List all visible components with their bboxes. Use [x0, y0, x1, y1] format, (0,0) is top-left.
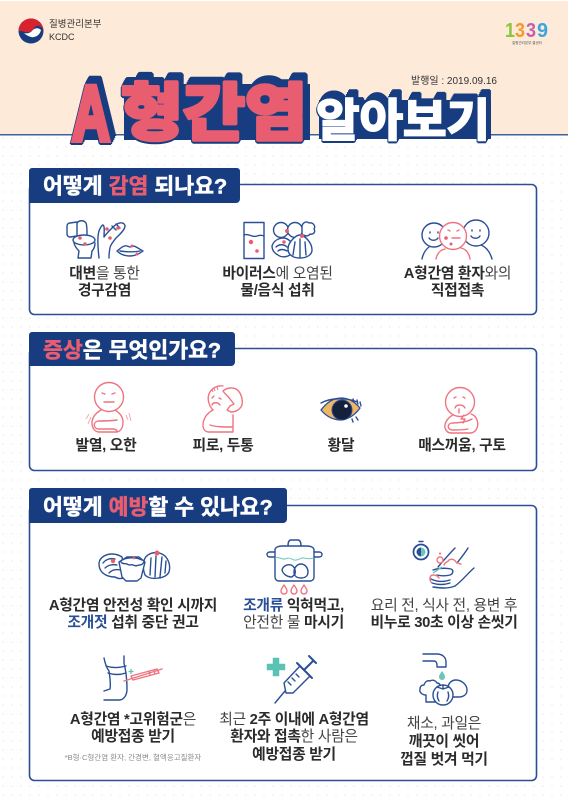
label: fatigue, headache: 피로, 두통: [193, 437, 253, 454]
label: high risk group vaccination: A형간염 *고위험군은: [70, 711, 196, 728]
icon: jaundiced eye: [321, 398, 361, 422]
icon: taegeuk emblem: [18, 18, 44, 44]
logo: 1339: 질병관리본부 콜센터: [512, 40, 542, 45]
panel: prevention: [29, 488, 536, 780]
icon: three people: [422, 220, 492, 259]
label: jaundice: 황달: [328, 437, 355, 454]
label: fecal-oral: 대변을 통한: [69, 265, 140, 282]
label: stop eating shellfish: [49, 597, 217, 631]
icon: syringe and cross: [267, 656, 316, 703]
icon: toilet, hand, lips: [67, 221, 143, 258]
label: stop eating shellfish: A형간염 안전성 확인 시까지: [49, 597, 217, 614]
icon: shellfish: [99, 550, 170, 581]
icon: faucet and vegetables: [420, 654, 467, 705]
icon: boiling pot: [267, 540, 322, 594]
heading: prevention: [29, 488, 287, 523]
label: high risk group vaccination: [65, 711, 201, 762]
label: contaminated water and food: 물/음식 섭취: [240, 282, 315, 299]
footnote: *B형·C형간염 환자, 간경변, 혈액응고질환자: [65, 752, 201, 762]
label: contaminated water and food: [222, 265, 333, 299]
heading: transmission: [29, 168, 240, 203]
logo: 1339: 9: [537, 20, 548, 42]
heading: symptoms: 증상은 무엇인가요?: [43, 338, 221, 362]
icon: water glass and food: [244, 222, 315, 258]
label: wash hands: 비누로 30초 이상 손씻기: [370, 614, 518, 631]
logo: 1339: 3: [526, 20, 536, 42]
label: direct contact: 직접접촉: [431, 282, 484, 299]
label: fecal-oral: [69, 265, 140, 299]
label: cook shellfish: 조개류 익혀먹고,: [243, 597, 344, 614]
icon: nausea and vomiting: [445, 388, 478, 433]
label: fecal-oral: 경구감염: [78, 282, 131, 299]
heading: symptoms: [29, 332, 235, 366]
logo: 1339: 1: [505, 20, 515, 42]
label: wash vegetables and fruits: 채소, 과일은: [407, 715, 481, 732]
logo: 1339: [505, 20, 548, 45]
title: 형간염: [121, 80, 307, 148]
logo: KCDC: 질병관리본부: [49, 18, 102, 30]
label: wash vegetables and fruits: 껍질 벗겨 먹기: [400, 751, 488, 768]
title: A: [72, 69, 110, 157]
label: fever, chills: 발열, 오한: [76, 437, 137, 454]
heading: transmission: 어떻게 감염 되나요?: [43, 174, 227, 198]
label: contaminated water and food: 바이러스에 오염된: [222, 265, 333, 282]
title: [72, 69, 491, 157]
logo: KCDC: KCDC: [49, 32, 75, 42]
label: stop eating shellfish: 조개젓 섭취 중단 권고: [67, 614, 199, 631]
icon: fatigue and headache: [203, 386, 242, 432]
label: recent contact vaccination: [219, 711, 369, 763]
logo: 1339: 3: [515, 20, 525, 42]
label: high risk group vaccination: 예방접종 받기: [91, 728, 175, 745]
header band: [0, 1, 568, 136]
label: recent contact vaccination: 환자와 접촉한 사람은: [230, 728, 358, 745]
panel: symptoms: [29, 332, 536, 470]
icon: arm vaccination: [104, 656, 162, 700]
label: nausea, vomiting: 매스꺼움, 구토: [418, 437, 506, 454]
heading: prevention: 어떻게 예방할 수 있나요?: [43, 494, 273, 520]
label: wash vegetables and fruits: 깨끗이 씻어: [409, 733, 479, 750]
label: cook shellfish: [243, 597, 344, 631]
label: wash hands: [370, 597, 518, 631]
label: direct contact: [404, 265, 511, 299]
label: direct contact: A형간염 환자와의: [404, 265, 511, 282]
icon: fever and chills: [86, 382, 131, 432]
logo: KCDC: [18, 18, 102, 44]
panel: how is it transmitted: [29, 168, 536, 314]
issue date: 발행일 : 2019.09.16: [411, 75, 497, 87]
title: 알아보기: [316, 95, 490, 146]
label: recent contact vaccination: 예방접종 받기: [252, 746, 336, 763]
label: wash hands: 요리 전, 식사 전, 용변 후: [371, 597, 517, 614]
label: cook shellfish: 안전한 물 마시기: [243, 614, 344, 631]
label: recent contact vaccination: 최근 2주 이내에 A형간염: [219, 711, 369, 728]
icon: hand washing timer: [414, 542, 474, 588]
label: wash vegetables and fruits: [400, 715, 488, 768]
